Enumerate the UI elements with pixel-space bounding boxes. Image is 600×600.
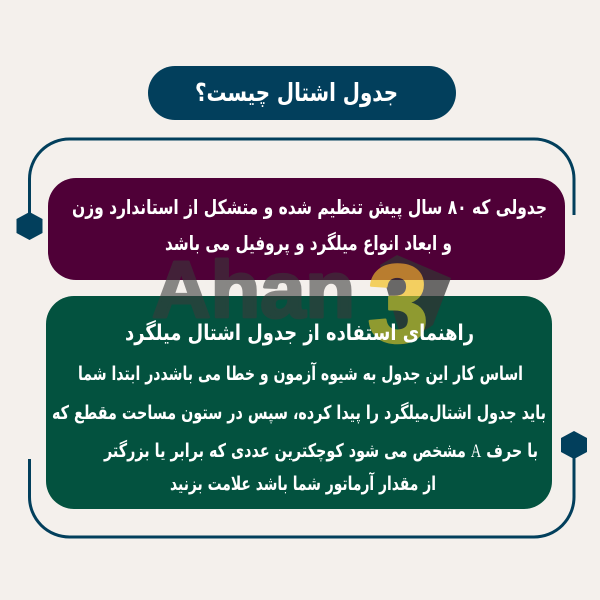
connector: top frame with hexagon — [16, 139, 574, 240]
heading: usage guide: راهنمای استفاده از جدول اشتال میلگرد — [125, 319, 474, 346]
text: usage guide — [52, 361, 546, 495]
watermark: Ahan3 logo: 3 — [367, 243, 429, 366]
text: usage guide: با حرف A مشخص می شود کوچکترین عددی که برابر یا بزرگتر — [103, 439, 538, 462]
panel: definition background — [48, 178, 565, 280]
watermark: Ahan3 logo — [152, 243, 451, 366]
watermark: Ahan3 logo: Ahan — [152, 245, 355, 334]
text: definition — [72, 195, 547, 256]
title — [148, 66, 456, 120]
title: جدول اشتال چیست؟ — [195, 78, 398, 108]
text: definition: و ابعاد انواع میلگرد و پروفیل می باشد — [165, 231, 452, 256]
text: usage guide: از مقدار آرماتور شما باشد علامت بزنید — [170, 471, 436, 495]
connector: bottom frame with hexagon — [30, 431, 587, 537]
text: definition: جدولی که ۸۰ سال پیش تنظیم شده و متشکل از استاندارد وزن — [72, 195, 547, 220]
panel: usage guide background — [46, 296, 552, 509]
